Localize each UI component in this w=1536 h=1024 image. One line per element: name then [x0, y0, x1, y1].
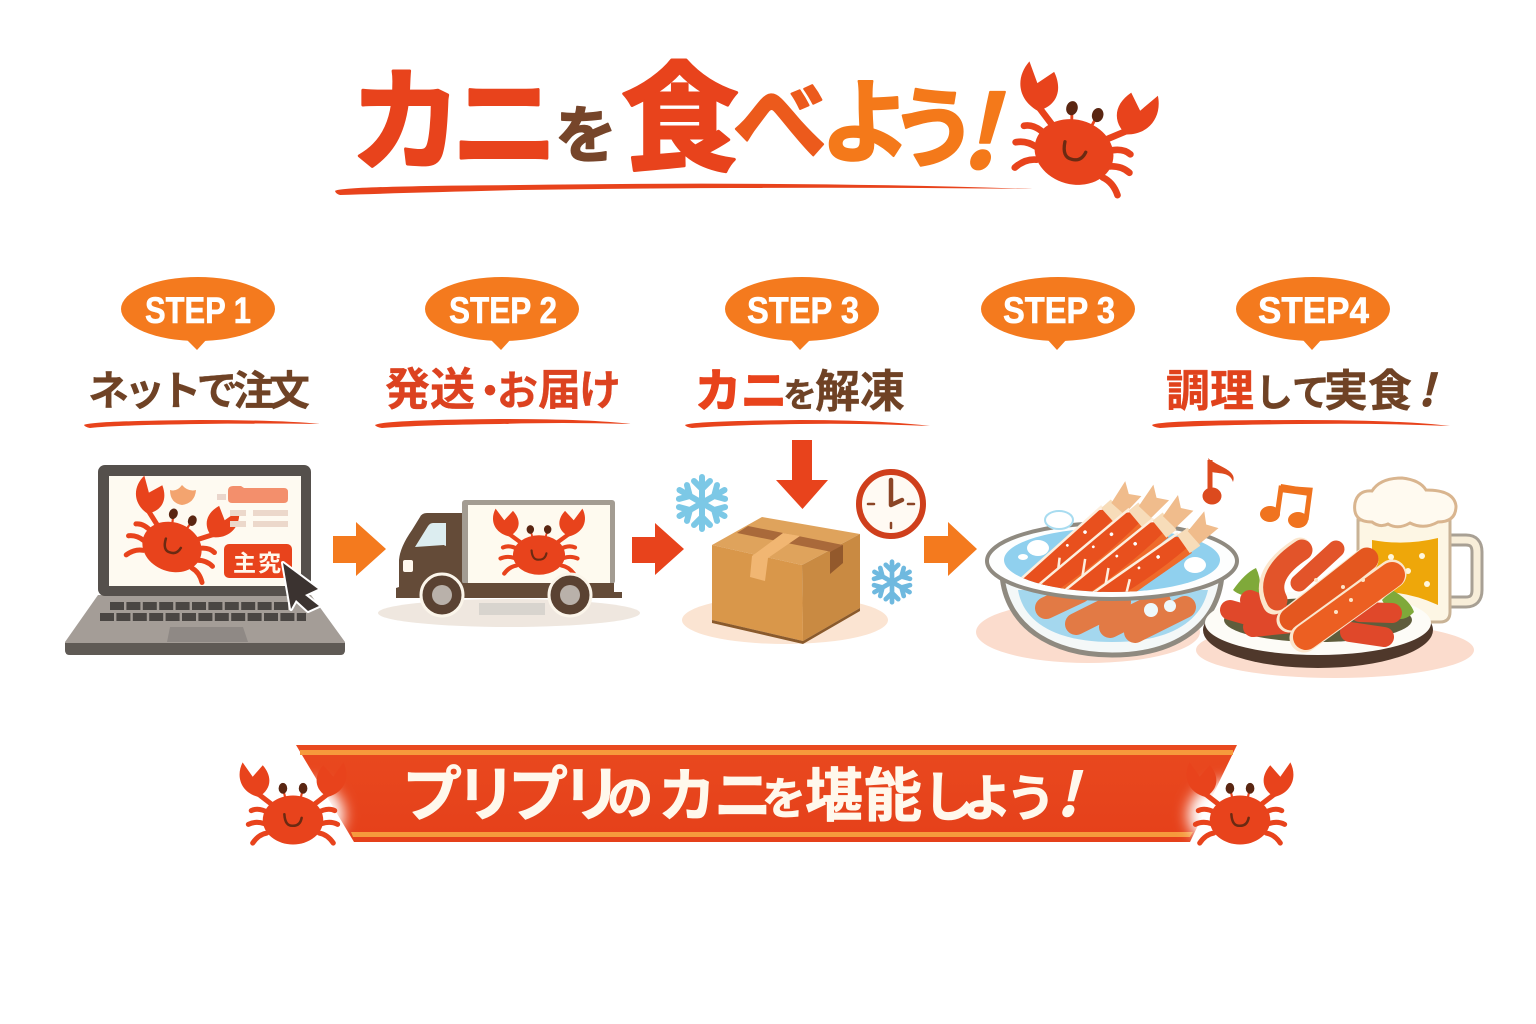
crab legs — [1021, 481, 1218, 592]
banner text: カ — [658, 749, 716, 833]
banner text: の — [607, 762, 653, 828]
step 3 second badge: STEP 3 — [1003, 290, 1115, 331]
banner text: ! — [1056, 747, 1083, 834]
banner — [296, 745, 1237, 842]
wheels — [421, 574, 591, 616]
step 3 label: 解凍 — [815, 355, 905, 420]
icon: snowflake small — [871, 562, 913, 602]
step 4 badge: STEP4 — [1258, 290, 1369, 331]
step 1 badge — [121, 277, 275, 350]
step 3 label — [695, 355, 905, 421]
banner text — [402, 747, 1083, 834]
icon: banner crab left — [240, 762, 346, 844]
step 4 label — [1166, 355, 1438, 419]
step 3 label: を — [783, 368, 817, 417]
icon: truck — [378, 500, 640, 627]
step 3 header — [685, 277, 930, 428]
crab pieces — [1230, 549, 1392, 638]
icon: plate of crab — [1203, 549, 1433, 668]
banner text: リ — [456, 747, 516, 834]
step 2 label: 届 — [538, 356, 581, 418]
leaves — [1233, 568, 1414, 619]
step 1 label: ネットで注文 — [88, 357, 310, 417]
step 2 badge: STEP 2 — [449, 290, 557, 331]
title: 食 — [621, 24, 739, 195]
step 4 header — [1152, 277, 1450, 428]
step 4 label: して — [1255, 362, 1330, 417]
banner text: 堪 — [805, 749, 863, 833]
banner text: リ — [562, 747, 622, 834]
title underline — [335, 184, 1033, 195]
step 3 badge — [725, 277, 879, 350]
step 1 badge: STEP 1 — [145, 290, 251, 331]
icon: cardboard box — [682, 517, 888, 644]
arrow: down — [776, 440, 828, 509]
icon: banner crab right — [1187, 762, 1293, 844]
laptop screen crab — [113, 475, 242, 588]
step 2 label: 発送 — [385, 353, 475, 418]
banner crab glows — [264, 781, 1268, 849]
title — [350, 24, 1005, 197]
title: カ — [350, 32, 462, 194]
title: ニ — [452, 39, 558, 193]
banner text: 能 — [864, 749, 922, 833]
step 3 second badge — [981, 277, 1135, 350]
icon: beer mug — [1355, 478, 1477, 622]
step 3 badge: STEP 3 — [747, 290, 859, 331]
banner text: プ — [508, 747, 568, 834]
pink shadows — [976, 601, 1474, 678]
arrow — [924, 522, 977, 576]
banner text: プ — [402, 747, 462, 834]
step 2 label — [385, 353, 621, 418]
step 4 badge — [1236, 277, 1390, 350]
arrow — [632, 523, 684, 575]
icon: title crab — [998, 60, 1162, 201]
title: べ — [733, 47, 827, 183]
arrow — [333, 522, 386, 576]
step 4 label: ! — [1418, 355, 1438, 419]
banner text: ニ — [714, 749, 772, 833]
banner text: う — [1006, 759, 1056, 831]
banner text: を — [762, 763, 806, 827]
step 2 badge — [425, 277, 579, 350]
banner text: よ — [962, 759, 1012, 831]
cursor — [283, 563, 319, 611]
banner text: し — [922, 753, 976, 832]
icon: music notes — [1202, 458, 1311, 528]
step 2 label: け — [579, 357, 621, 418]
step 2 label: ・ — [470, 359, 510, 417]
icon: clock — [859, 472, 923, 536]
step 4 label: 実食 — [1324, 355, 1412, 419]
step 1 header — [84, 277, 320, 428]
icon: shell — [170, 485, 196, 505]
order button: 主究 — [233, 544, 281, 578]
icon: snowflake large — [675, 477, 729, 529]
step 2 label: お — [497, 357, 538, 417]
title: う — [890, 59, 978, 186]
truck crab — [493, 509, 585, 575]
submerged legs — [1046, 592, 1185, 632]
step 4 label: 調理 — [1166, 355, 1254, 419]
title: ! — [960, 52, 1005, 197]
title: を — [555, 85, 617, 175]
step 3 label: カニ — [695, 355, 787, 421]
title: よ — [820, 49, 912, 182]
step 2 header — [375, 277, 631, 428]
icon: bowl with crab legs — [987, 480, 1237, 655]
icon: laptop — [65, 465, 345, 655]
